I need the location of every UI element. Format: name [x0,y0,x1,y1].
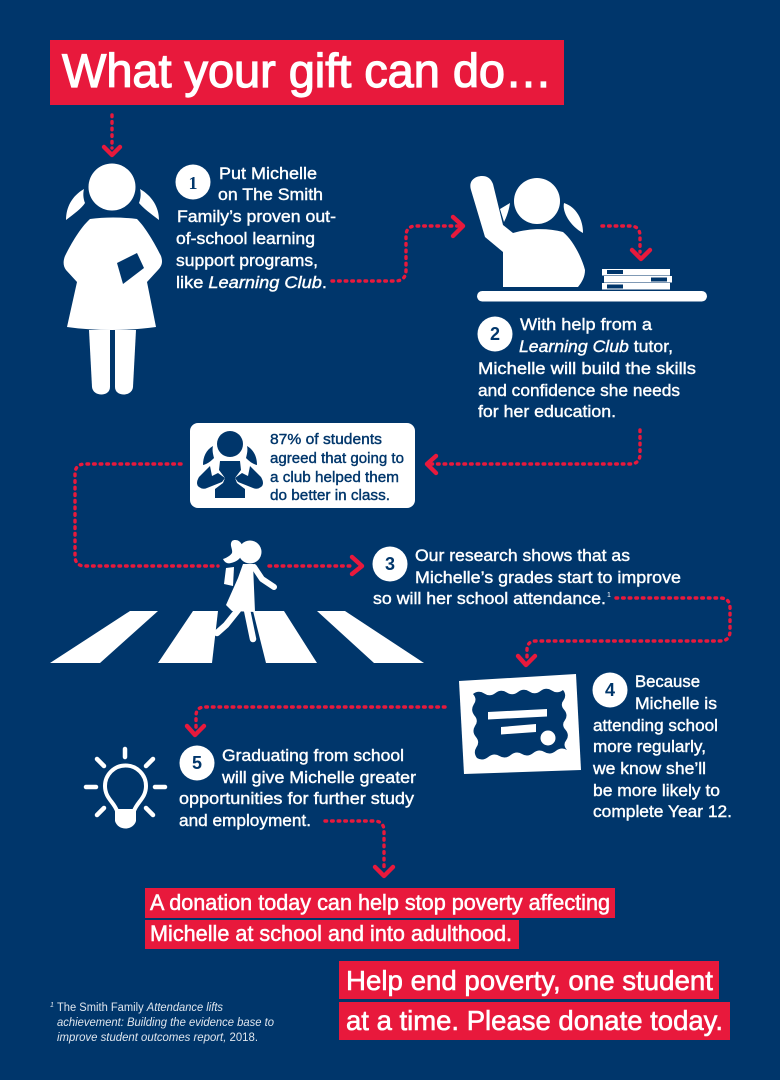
step 4 text: Because [635,672,700,691]
call to action: at a time. Please donate today. [346,1005,723,1036]
step 1 text: 1 [188,173,198,193]
footnote [50,1002,275,1044]
step 4 text: complete Year 12. [593,802,732,821]
call to action: Help end poverty, one student [346,965,713,996]
donation message: Michelle at school and into adulthood. [150,921,512,946]
arrow: title to girl [104,115,120,155]
step 2 text: and confidence she needs [478,381,680,400]
icon: standing girl with book [64,164,162,394]
step 1 text: support programs, [176,251,318,270]
donation message [145,888,615,949]
footnote: achievement: Building the evidence base to [57,1017,275,1029]
arrow: step 2 to stat box [427,430,640,473]
step 4 text: we know she’ll [592,759,706,778]
icon: certificate [459,674,581,774]
footnote: 1 [50,1002,54,1009]
arrow: certificate to step 5 [187,707,445,735]
arrow: stat box to step 3 [75,464,362,574]
step 3 text: Our research shows that as [415,546,630,565]
callout: 87% stat [190,423,415,508]
donation message: A donation today can help stop poverty affecting [150,890,610,915]
step 3 text: 1 [607,592,611,599]
stat text: do better in class. [270,487,390,504]
step 1 text [176,164,336,292]
icon: student raising hand at desk [470,176,707,302]
step 4 text: more regularly, [593,737,706,756]
step 1 text: Family’s proven out- [177,207,336,226]
footnote: The Smith Family Attendance lifts [57,1002,223,1014]
step 5 text: opportunities for further study [179,789,415,808]
stat text: a club helped them [270,469,399,486]
step 2 text: With help from a [520,315,653,334]
icon: walking girl [217,540,274,639]
step 5 text: 5 [192,753,202,773]
step 2 text [478,315,696,421]
stat text [270,431,404,504]
arrow: step 5 to donation message [325,821,393,876]
stat text: agreed that going to [270,450,404,467]
step 3 text: 3 [385,554,395,574]
footnote: improve student outcomes report, 2018. [57,1032,258,1044]
arrow: step 3 to certificate [518,598,730,665]
title: What your gift can do… [62,44,552,97]
step 2 text: for her education. [478,402,616,421]
call to action [339,961,730,1040]
step 5 text: will give Michelle greater [221,768,416,787]
stat text: 87% of students [270,431,382,448]
step 4 text: Michelle is [635,694,717,713]
step 2 text: Learning Club tutor, [519,337,673,356]
step 2 text: 2 [490,324,500,344]
step 4 text [592,672,732,821]
step 3 text: Michelle’s grades start to improve [415,568,681,587]
step 2 text: Michelle will build the skills [478,359,696,378]
icon: zebra crossing [50,611,424,663]
step 5 text: and employment. [179,811,311,830]
step 3 text [372,546,681,608]
icon: student hugging books [197,431,263,498]
step 4 text: 4 [605,680,615,700]
step 1 text: Put Michelle [219,164,317,183]
step 5 text: Graduating from school [222,746,404,765]
step 1 text: like Learning Club . [176,273,327,292]
step 4 text: be more likely to [593,781,720,800]
step 1 text: of-school learning [176,229,315,248]
step 5 text [179,746,416,830]
step 4 text: attending school [593,716,718,735]
arrow: step 1 to step 2 [332,217,463,281]
icon: light bulb [86,749,165,828]
step 1 text: on The Smith [218,185,323,204]
arrow: student to books [602,226,650,259]
step 3 text: so will her school attendance. [373,589,606,608]
